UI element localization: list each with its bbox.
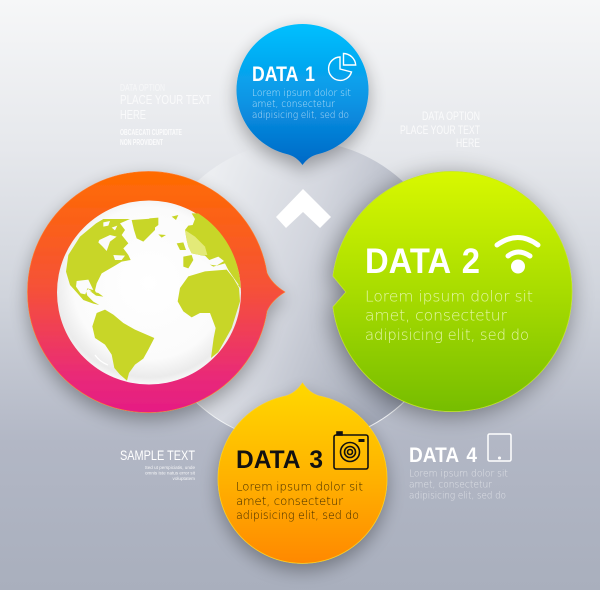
text block: top right: PLACE YOUR TEXT bbox=[400, 123, 480, 137]
icon: tablet bbox=[488, 434, 511, 461]
text block: top right: HERE bbox=[456, 136, 480, 150]
data 4 heading: DATA 4 bbox=[409, 444, 477, 467]
icon: pie chart bbox=[329, 54, 356, 80]
text block: top left bbox=[120, 83, 211, 147]
text block: top left: NON PROVIDENT bbox=[120, 138, 163, 147]
data 1 heading: DATA 1 bbox=[252, 63, 315, 86]
data 1 body: Lorem ipsum dolor sit bbox=[252, 88, 351, 99]
continents south bbox=[92, 270, 240, 381]
continents east bbox=[149, 213, 241, 288]
panel: data 3 bbox=[218, 383, 387, 563]
data 4 body bbox=[409, 469, 508, 502]
data 3 body: adipisicing elit, sed do bbox=[236, 508, 359, 522]
data 2 body: amet, consectetur bbox=[365, 307, 508, 325]
text block: top left: PLACE YOUR TEXT bbox=[120, 92, 211, 107]
text block: top left: HERE bbox=[120, 107, 146, 122]
icon: wifi bbox=[497, 238, 538, 274]
data 1 body: amet, consectetur bbox=[252, 99, 335, 110]
icon: chevron up bbox=[276, 189, 331, 228]
data 3 heading: DATA 3 bbox=[236, 446, 323, 474]
green circle bbox=[333, 172, 572, 412]
panel: data 4 bbox=[409, 434, 511, 502]
ring with pointer bbox=[28, 172, 285, 413]
data 2 body bbox=[365, 288, 533, 344]
blue circle bbox=[236, 24, 368, 165]
data 2 body: adipisicing elit, sed do bbox=[365, 326, 529, 344]
globe highlight bbox=[95, 355, 108, 365]
text block: top right bbox=[400, 109, 480, 150]
text block: sample text bbox=[120, 447, 196, 481]
central glass disc bbox=[149, 141, 451, 443]
text block: sample text: Sed ut perspiciatis, unde bbox=[145, 465, 195, 470]
panel: globe ring bbox=[28, 172, 285, 413]
icon: camera bbox=[334, 432, 368, 469]
text block: top left: OBCAECATI CUPIDITATE bbox=[120, 128, 182, 137]
panel: data 2 bbox=[333, 172, 572, 412]
yellow circle bbox=[218, 383, 387, 563]
text block: sample text: voluptatem bbox=[173, 476, 195, 481]
data 4 body: adipisicing elit, sed do bbox=[409, 491, 506, 502]
panel: data 1 bbox=[236, 24, 368, 165]
data 3 body bbox=[236, 480, 363, 522]
data 4 body: Lorem ipsum dolor sit bbox=[409, 469, 508, 480]
data 1 body bbox=[252, 88, 351, 121]
text block: sample text: SAMPLE TEXT bbox=[120, 447, 195, 463]
data 2 heading: DATA 2 bbox=[365, 242, 480, 281]
data 3 body: amet, consectetur bbox=[236, 494, 343, 508]
globe bbox=[57, 200, 241, 384]
data 1 body: adipisicing elit, sed do bbox=[252, 110, 349, 121]
text block: top left: DATA OPTION bbox=[120, 83, 165, 94]
data 2 body: Lorem ipsum dolor sit bbox=[365, 288, 533, 306]
text block: top right: DATA OPTION bbox=[422, 109, 480, 123]
text block: sample text: omnis iste natus error sit bbox=[145, 470, 196, 476]
continents west bbox=[66, 218, 155, 305]
data 3 body: Lorem ipsum dolor sit bbox=[236, 480, 363, 494]
data 4 body: amet, consectetur bbox=[409, 480, 492, 491]
